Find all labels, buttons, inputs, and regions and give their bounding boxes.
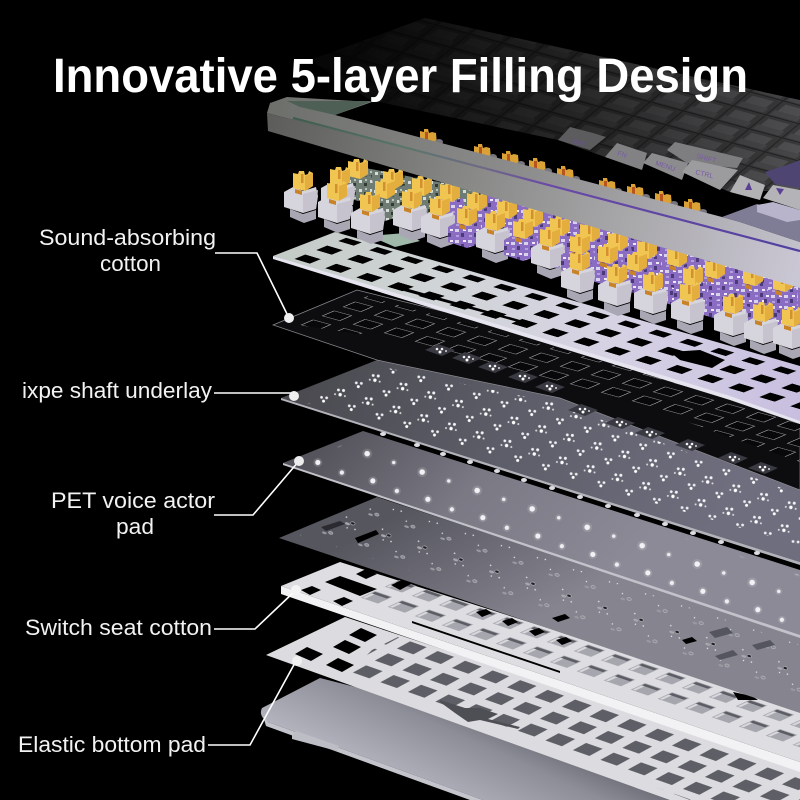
front keycap row — [558, 127, 800, 210]
pcb dot clusters — [300, 502, 800, 700]
seat plate front rim — [281, 586, 800, 772]
leader line — [215, 253, 289, 318]
plate edge highlight — [273, 256, 800, 424]
key ALT — [558, 127, 606, 150]
bottom plate body — [266, 617, 800, 800]
leader dot — [292, 656, 302, 666]
seat plate black holes — [301, 569, 758, 700]
leader dot — [289, 391, 299, 401]
leader line — [208, 661, 296, 745]
plate body — [273, 232, 800, 422]
leader dot — [284, 313, 294, 323]
leader dot — [291, 585, 301, 595]
purple cursor key shade — [765, 160, 800, 188]
leader line — [214, 461, 299, 515]
key ALT: ALT — [571, 138, 586, 149]
label: elastic bottom pad — [18, 656, 302, 757]
black foam sheet — [273, 290, 800, 490]
label text: Elastic bottom pad — [18, 732, 206, 757]
rim studs — [380, 432, 760, 555]
title: Innovative 5-layer Filling Design — [53, 50, 748, 103]
ixpe sheet — [281, 360, 800, 562]
grey switch internals — [350, 165, 490, 230]
label: sound-absorbing cotton — [39, 225, 294, 323]
leader line — [214, 591, 295, 629]
green tinted patch — [370, 233, 420, 247]
pet sheet front rim — [283, 463, 800, 638]
switch seat cotton layer — [281, 562, 800, 772]
cursor pocket recess — [722, 204, 800, 242]
keyboard case — [267, 97, 800, 288]
RGB light strip — [293, 118, 800, 251]
purple switch internals — [470, 185, 800, 345]
plate square holes — [285, 236, 800, 410]
key SHIFT: SHIFT — [696, 153, 718, 165]
top white plate — [273, 232, 800, 424]
back keycap rows — [310, 18, 800, 192]
PET voice actor pad layer — [283, 431, 800, 638]
key FN: FN — [616, 150, 627, 160]
tray front rim — [263, 716, 483, 800]
ixpe front rim — [281, 398, 800, 565]
key CTRL: CTRL — [695, 169, 714, 180]
keycaps fading into the dark — [310, 18, 800, 210]
key down arrow — [763, 185, 800, 210]
bottom plate slot — [440, 700, 520, 729]
label text: cotton — [100, 251, 161, 276]
see-through key windows — [425, 344, 778, 474]
case front face — [267, 113, 800, 288]
pet dots — [295, 436, 800, 630]
elastic bottom pad layer — [261, 617, 800, 800]
pet sheet — [283, 431, 800, 636]
label text: Sound-absorbing — [39, 225, 216, 250]
label text: pad — [116, 514, 154, 539]
label: switch seat cotton — [25, 585, 301, 640]
stabiliser cut-outs — [404, 288, 725, 368]
leader dot — [294, 456, 304, 466]
pcb sheet — [279, 497, 800, 713]
seat plate top surface — [281, 562, 800, 762]
leader line — [214, 392, 293, 394]
label: ixpe shaft underlay — [22, 378, 299, 403]
seat plate holes — [350, 578, 800, 750]
mechanical switches — [284, 159, 800, 359]
tray foot — [292, 731, 339, 751]
label: PET voice actor pad — [51, 456, 304, 539]
pcb grey slots — [709, 627, 775, 660]
pcb stabiliser slots — [321, 521, 697, 644]
switch fog between stems — [350, 165, 800, 345]
key MENU: MENU — [654, 160, 676, 173]
ixpe shaft underlay layer — [281, 360, 800, 565]
key left arrow — [730, 175, 765, 200]
key SHIFT — [667, 142, 743, 168]
case rim top — [267, 97, 800, 252]
key CTRL — [682, 160, 738, 190]
PCB layer with small dots — [279, 497, 800, 713]
key MENU — [643, 153, 688, 180]
bottom plate holes — [350, 636, 800, 800]
bottom plate black corner holes — [295, 628, 377, 672]
outlined key cut-outs — [298, 295, 800, 462]
ixpe dot clusters — [296, 366, 800, 545]
label text: PET voice actor — [51, 488, 215, 513]
switch stems behind the case — [420, 129, 707, 215]
label text: Switch seat cotton — [25, 615, 212, 640]
sound-absorbing cotton black layer — [273, 290, 800, 490]
label text: ixpe shaft underlay — [22, 378, 212, 403]
bottom case tray — [261, 678, 800, 800]
cursor pocket light key — [757, 202, 800, 222]
green display window — [287, 101, 372, 115]
key FN — [605, 143, 647, 170]
